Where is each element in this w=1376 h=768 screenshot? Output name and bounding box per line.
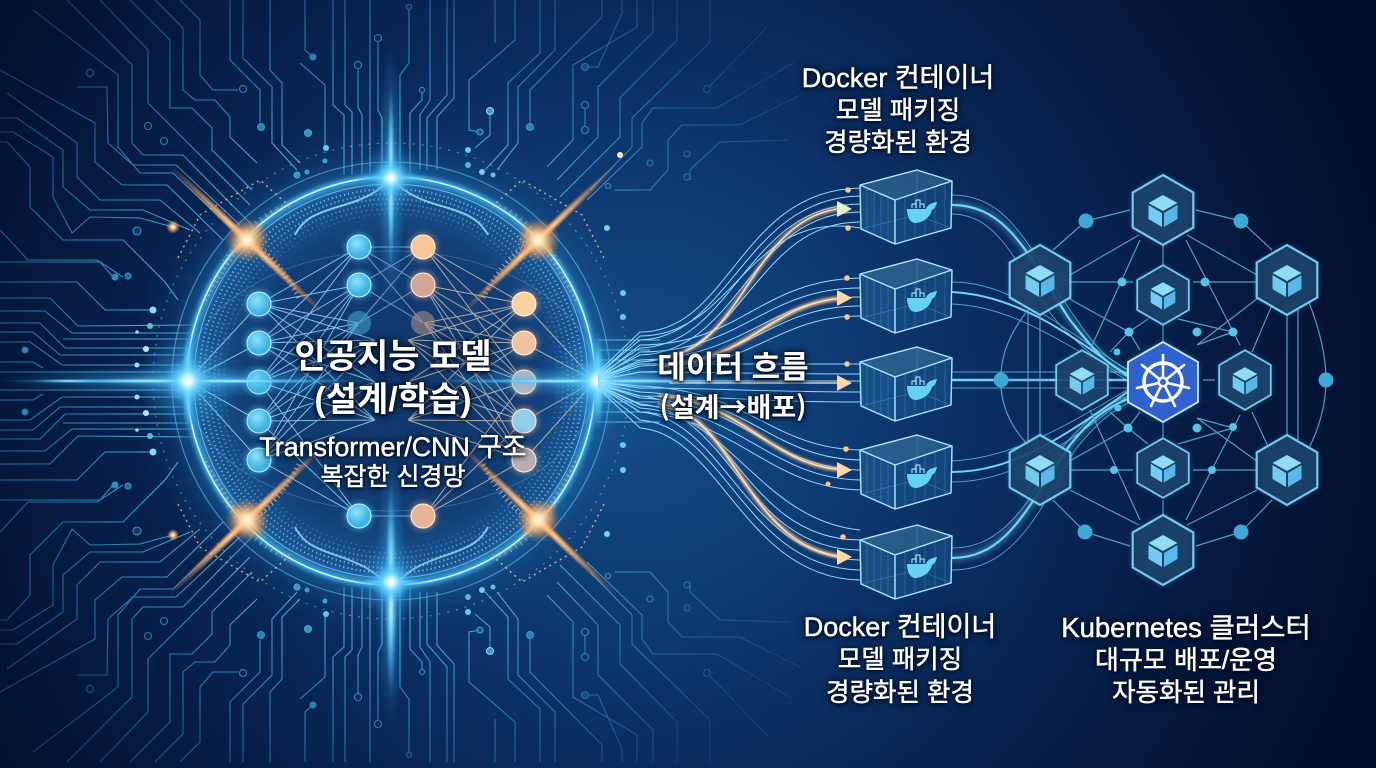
circuit traces: [0, 0, 800, 762]
heading: AI model: (설계/학습): [314, 381, 472, 419]
worker hexagon upper left: [1010, 245, 1070, 315]
text: model details: 복잡한 신경망: [321, 463, 465, 491]
icon: kubernetes helm hub: [1128, 342, 1198, 422]
blue streams: [598, 188, 860, 580]
text: docker top: [800, 62, 994, 158]
heading: data flow: (설계→배포): [660, 386, 806, 425]
panel: kubernetes cluster: [994, 175, 1334, 585]
docker containers: [860, 170, 952, 599]
inner hexagon bottom: [1137, 438, 1189, 498]
inner hexagon top: [1137, 265, 1189, 325]
text: kubernetes: 자동화된 관리: [1112, 679, 1260, 707]
cluster connections: [1000, 210, 1326, 546]
text: kubernetes: Kubernetes 클러스터: [1061, 612, 1311, 643]
worker hexagon lower right: [1257, 435, 1317, 505]
worker hexagon upper right: [1257, 245, 1317, 315]
text: docker top: Docker 컨테이너: [802, 63, 994, 93]
cluster small nodes: [994, 214, 1334, 540]
flow arrowheads: [826, 187, 852, 565]
text: docker bottom: Docker 컨테이너: [804, 612, 996, 642]
text: docker bottom: 경량화된 환경: [826, 679, 974, 707]
heading: data flow: [652, 346, 812, 426]
orange streaks: [164, 160, 330, 320]
horizontal beam: [0, 365, 378, 397]
network connections: [188, 247, 595, 516]
container 5: [860, 525, 952, 599]
blue neurons: [245, 233, 373, 530]
container 1: [860, 170, 952, 244]
container 4: [860, 435, 952, 509]
text: docker bottom: [801, 610, 997, 708]
heading: AI model: [290, 333, 496, 422]
worker hexagon top: [1133, 175, 1193, 245]
heading: AI model: 인공지능 모델: [294, 338, 492, 376]
text: docker top: 경량화된 환경: [824, 129, 972, 157]
worker hexagon lower left: [1010, 435, 1070, 505]
orange neurons: [409, 233, 538, 530]
heading: data flow: 데이터 흐름: [657, 350, 809, 385]
text: docker top: 모델 패키징: [836, 96, 960, 124]
text: model details: Transformer/CNN 구조: [259, 432, 527, 462]
data flow lines to containers: [598, 188, 860, 580]
inner hexagon left: [1056, 350, 1108, 410]
orange streams: [660, 208, 845, 557]
light flares: [0, 48, 768, 725]
text: model details: [256, 428, 530, 492]
streams from containers to cluster: [952, 195, 1130, 570]
flow glow: [600, 370, 720, 392]
text: docker bottom: 모델 패키징: [838, 646, 962, 674]
inner hexagon right: [1219, 350, 1271, 410]
text: kubernetes: [1060, 612, 1311, 707]
container 3: [860, 347, 952, 421]
text: kubernetes: 대규모 배포/운영: [1095, 645, 1277, 675]
vertical beam: [377, 48, 405, 308]
sphere mesh: [153, 143, 629, 619]
container 2: [860, 259, 952, 333]
sphere body and rim glow: [129, 119, 653, 643]
worker hexagon bottom: [1133, 515, 1193, 585]
panel: neural sphere: [0, 48, 768, 725]
